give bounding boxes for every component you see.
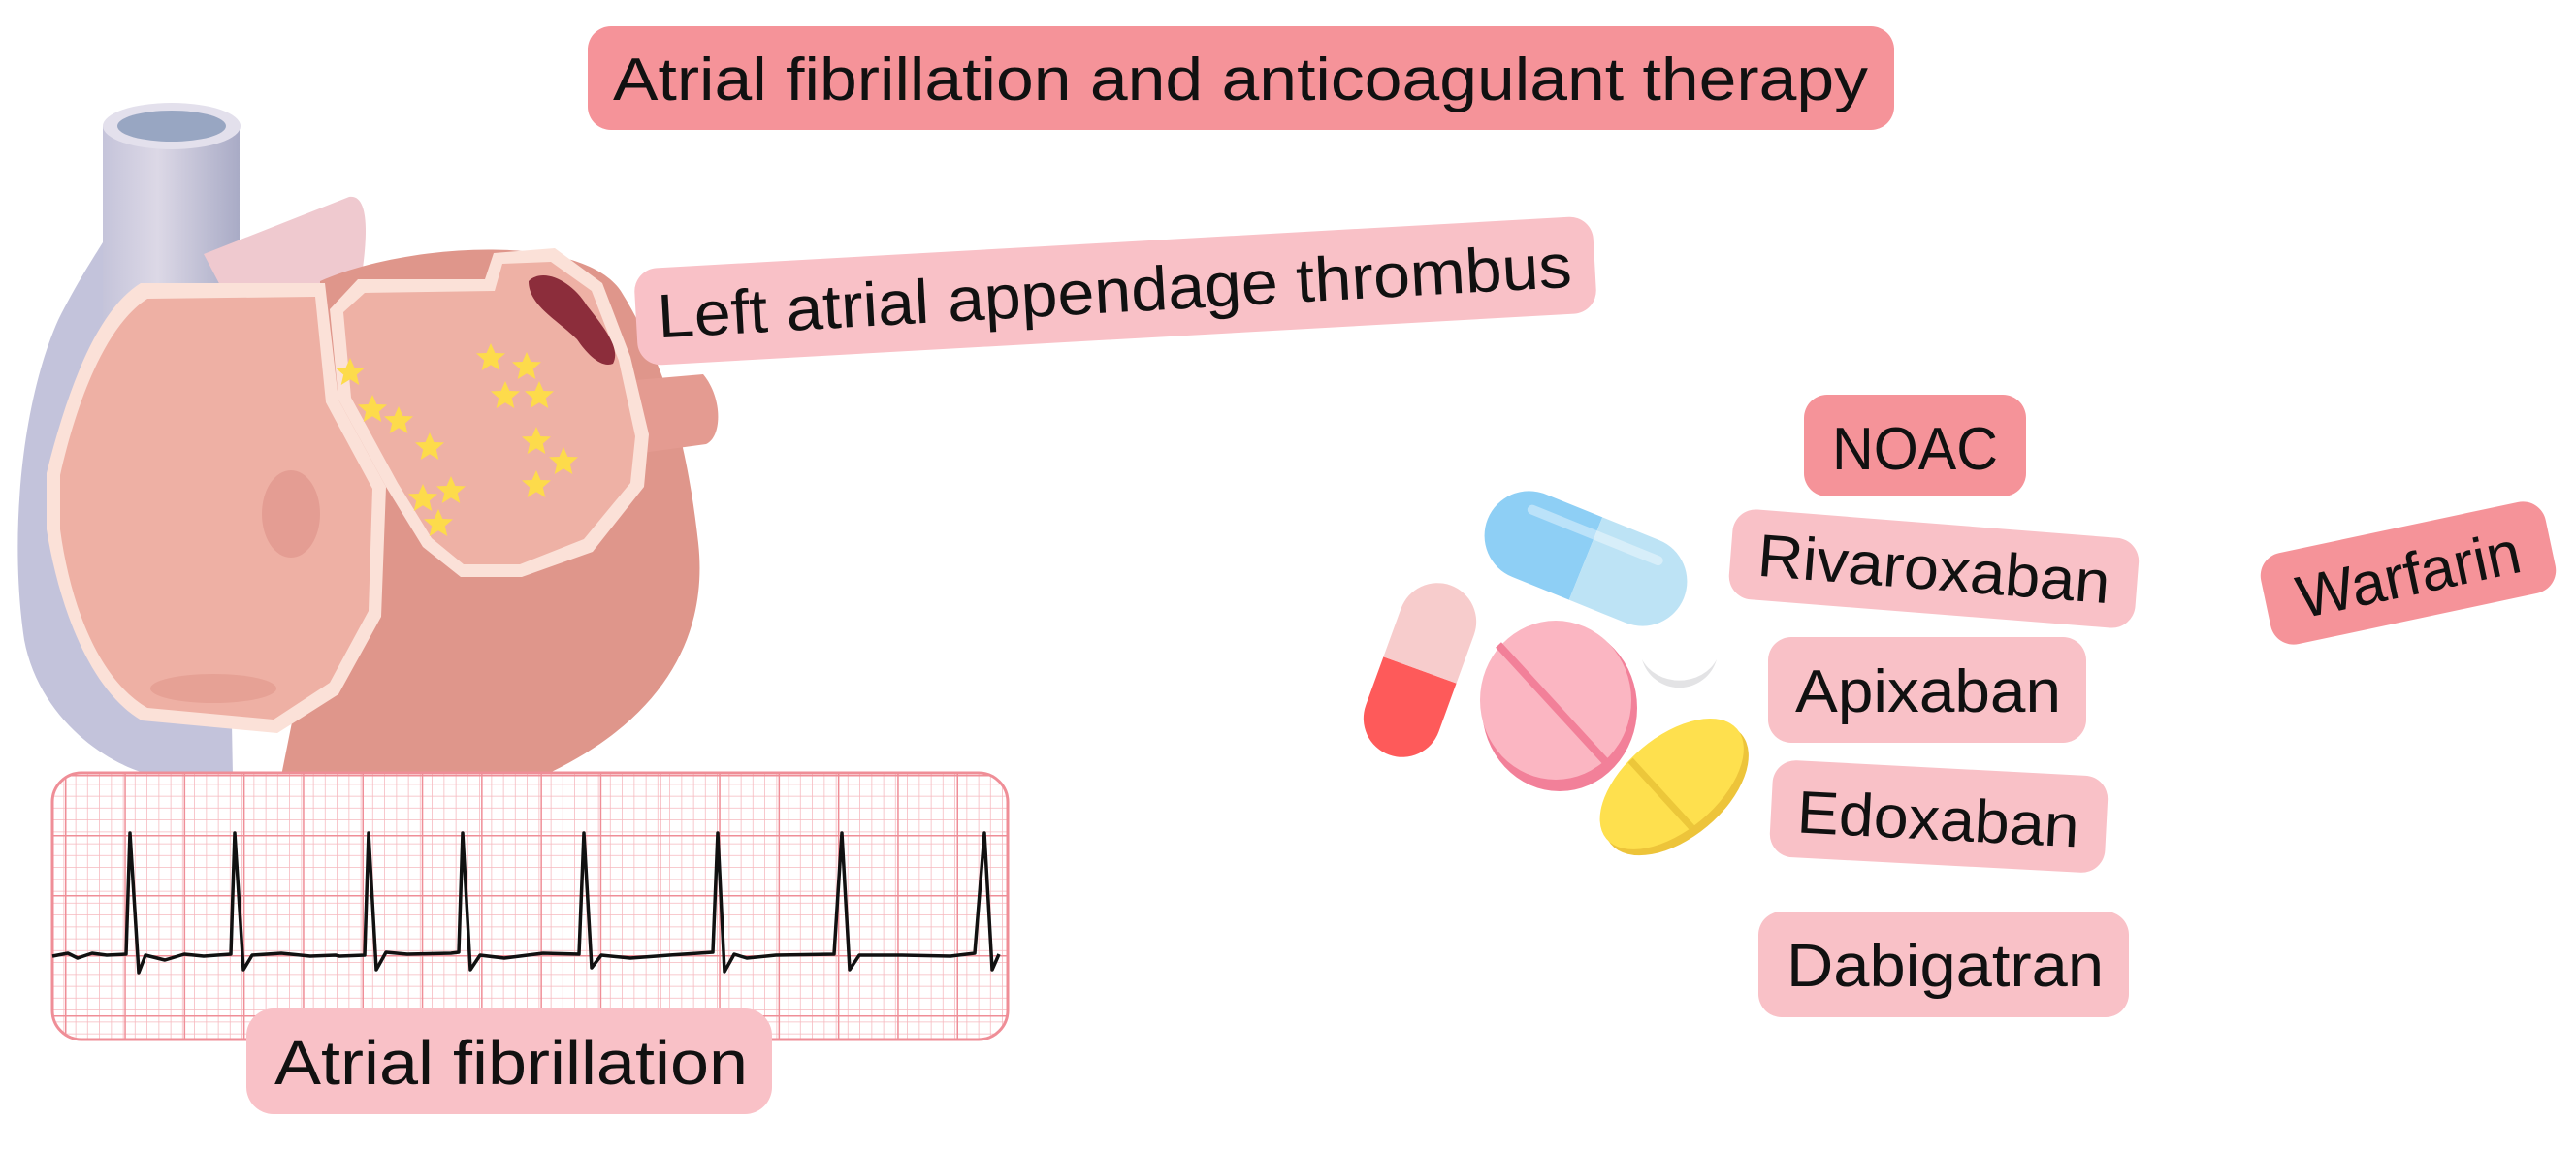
yellow tablet: [1576, 693, 1773, 881]
label: atrial fibrillation: [246, 1008, 772, 1114]
label: Dabigatran: Dabigatran: [1787, 933, 2104, 1000]
chart: ECG strip: [52, 773, 1008, 1040]
label: atrial fibrillation: Atrial fibrillation: [274, 1028, 748, 1098]
label: Rivaroxaban: [1727, 508, 2141, 629]
label: Warfarin: Warfarin: [2291, 519, 2527, 632]
label: Edoxaban: [1769, 759, 2109, 874]
icon: thrombus: [529, 275, 615, 365]
label: Apixaban: [1768, 637, 2086, 743]
label: left atrial appendage thrombus: [633, 215, 1597, 367]
grey crescent: [1642, 659, 1717, 688]
vena cava: [103, 103, 241, 320]
label: Warfarin: [2256, 497, 2560, 649]
illustration: heart: [17, 103, 718, 776]
icon: pills: [1353, 478, 1773, 881]
label: left atrial appendage thrombus: Left atrial appendage thrombus: [656, 231, 1573, 351]
right atrium chamber: [47, 283, 386, 733]
stars: [336, 343, 578, 536]
label: Rivaroxaban: Rivaroxaban: [1755, 523, 2112, 617]
label: NOAC: NOAC: [1832, 416, 1998, 483]
left atrium chamber: [330, 248, 649, 577]
back body: [281, 250, 699, 776]
blue capsule: [1471, 478, 1700, 639]
blue outer body: [17, 242, 233, 776]
pale flap: [204, 197, 366, 291]
right vessel: [601, 374, 718, 456]
title: [588, 26, 1894, 130]
red capsule: [1353, 572, 1487, 768]
label: Apixaban: Apixaban: [1795, 658, 2061, 725]
title: Atrial fibrillation and anticoagulant therapy: [613, 47, 1868, 113]
label: Edoxaban: Edoxaban: [1795, 779, 2080, 861]
label: NOAC: [1804, 395, 2026, 496]
pink tablet: [1480, 621, 1637, 791]
label: Dabigatran: [1758, 912, 2129, 1017]
